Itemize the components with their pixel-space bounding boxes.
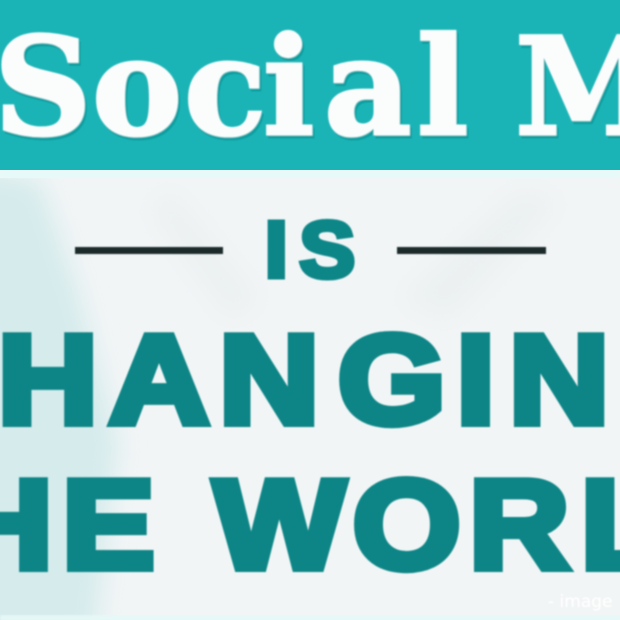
headline: CHANGING THE WORLD [0, 310, 620, 596]
word IS: IS [265, 206, 355, 295]
title banner [0, 0, 620, 170]
connector word: IS with rules [75, 206, 546, 295]
right rule [397, 247, 546, 254]
banner background [0, 0, 620, 170]
background panel [0, 165, 620, 620]
watermark: - image [548, 592, 612, 612]
left rule [75, 247, 223, 254]
